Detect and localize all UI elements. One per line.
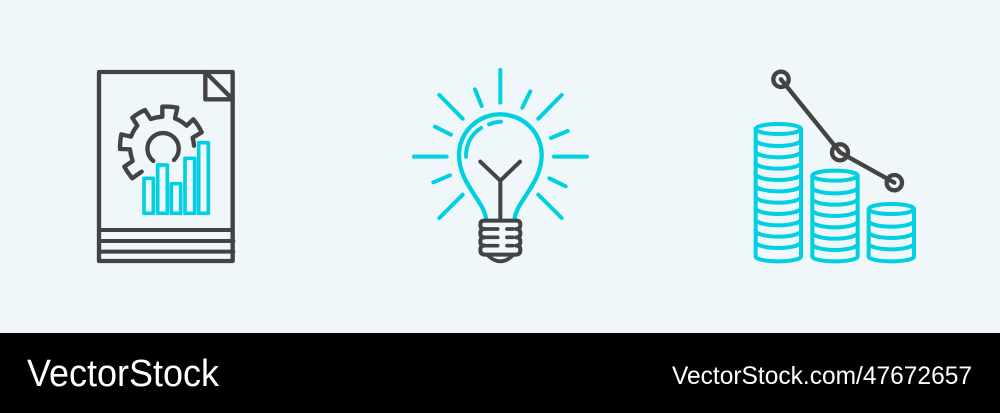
bar chart — [144, 143, 208, 213]
icon: coin stacks with falling line — [756, 72, 914, 261]
bulb glass — [459, 114, 542, 218]
document page outline — [99, 72, 233, 261]
footer bar — [0, 333, 1000, 413]
logo wordmark: VectorStock — [27, 353, 220, 395]
base tip — [488, 255, 513, 261]
gear centre arc — [147, 133, 179, 161]
gear outline — [120, 107, 202, 178]
document text lines — [99, 230, 233, 252]
folded corner — [205, 72, 233, 99]
screw base — [480, 221, 520, 255]
tall coin stack — [756, 124, 801, 261]
icon: light bulb with rays — [414, 70, 587, 261]
image id: VectorStock.com/47672657 — [672, 362, 972, 390]
bulb highlight — [466, 122, 501, 157]
icon: document with gear and bar chart — [99, 72, 233, 261]
short coin stack — [869, 204, 914, 261]
medium coin stack — [812, 171, 858, 261]
base thread lines — [484, 229, 513, 246]
falling trend line — [773, 72, 902, 190]
light rays — [414, 70, 587, 218]
filament — [480, 162, 520, 220]
